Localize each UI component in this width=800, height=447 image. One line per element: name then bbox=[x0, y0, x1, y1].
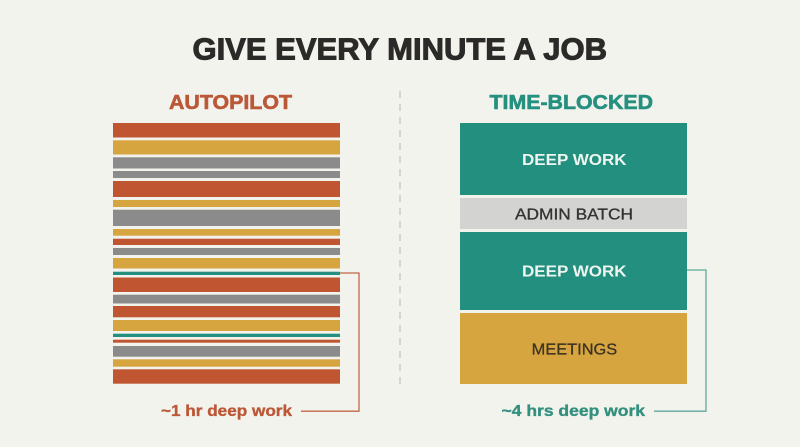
block: admin batch: ADMIN BATCH bbox=[515, 206, 633, 224]
block: meetings bbox=[460, 313, 687, 384]
block: deep work 2: DEEP WORK bbox=[522, 264, 627, 281]
panel: time-blocked bbox=[460, 92, 706, 420]
callout: time-blocked: ~4 hrs deep work bbox=[502, 403, 645, 420]
connector: time-blocked deep work bbox=[654, 270, 706, 411]
block: deep work 2 bbox=[460, 232, 687, 310]
fragmented schedule stripes bbox=[113, 123, 340, 384]
heading: time-blocked: TIME-BLOCKED bbox=[490, 92, 653, 114]
block: deep work 1: DEEP WORK bbox=[522, 152, 627, 169]
block: deep work 1 bbox=[460, 123, 687, 195]
callout: autopilot: ~1 hr deep work bbox=[161, 403, 292, 420]
heading: autopilot: AUTOPILOT bbox=[169, 92, 292, 114]
title: GIVE EVERY MINUTE A JOB bbox=[192, 32, 607, 66]
block: admin batch bbox=[460, 198, 687, 229]
panel: autopilot bbox=[113, 92, 359, 420]
connector: autopilot deep work bbox=[301, 273, 359, 411]
block: meetings: MEETINGS bbox=[532, 342, 617, 358]
